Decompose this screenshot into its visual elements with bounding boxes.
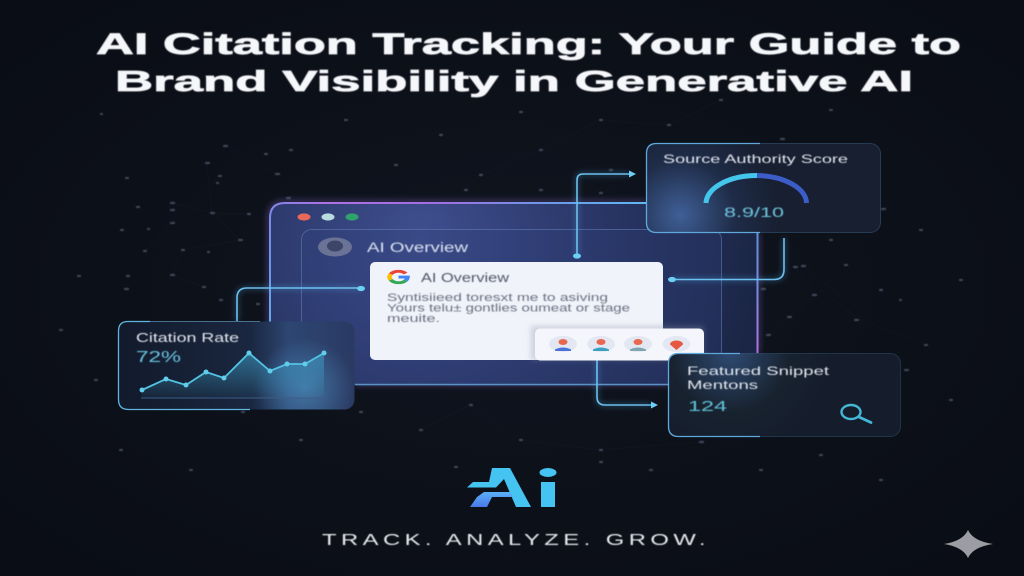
icon: person red-teal (587, 336, 615, 352)
score value: 8.9/10 (724, 205, 784, 220)
panel: citation rate (118, 322, 354, 410)
icon: google logo (390, 271, 408, 283)
connector arrowheads and nodes (357, 170, 676, 408)
icon: person red-blue (549, 336, 577, 352)
avatar icon (318, 238, 352, 256)
card body text: meuite. (387, 313, 440, 325)
card body text (387, 292, 630, 325)
panel: source authority score (646, 144, 880, 232)
window heading: AI Overview (367, 240, 468, 255)
icon: heart pin (662, 336, 690, 352)
icon: person red-grey (624, 336, 652, 352)
line chart (140, 350, 326, 398)
logo: AI mark (467, 468, 556, 507)
title: Brand Visibility in Generative AI (115, 66, 913, 98)
icon: four-point sparkle (944, 530, 993, 558)
particle network background (60, 100, 962, 480)
title: AI Citation Tracking: Your Guide to (96, 28, 961, 61)
inner panel (302, 230, 722, 384)
featured snippet label: Featured Snippet (687, 364, 830, 378)
card heading: AI Overview (421, 271, 510, 285)
icon: magnifier (842, 405, 871, 422)
gauge (706, 176, 806, 203)
reactions card (531, 326, 704, 360)
window control dots (298, 213, 358, 221)
source authority label: Source Authority Score (663, 152, 848, 166)
card body text: Yours telu± gontlies oumeat or stage (387, 302, 630, 314)
white AI overview card (370, 262, 663, 360)
panel: featured snippet mentions: Mentons (687, 378, 758, 392)
card body text: Syntisiieed toresxt me to asiving (387, 292, 608, 304)
connector lines (237, 174, 784, 405)
mentions value: 124 (688, 399, 727, 415)
citation rate value: 72% (136, 349, 181, 366)
main browser window (269, 202, 758, 385)
title (96, 28, 961, 98)
tagline: TRACK. ANALYZE. GROW. (322, 532, 710, 549)
citation rate label: Citation Rate (136, 331, 239, 345)
panel: featured snippet mentions (668, 354, 900, 436)
